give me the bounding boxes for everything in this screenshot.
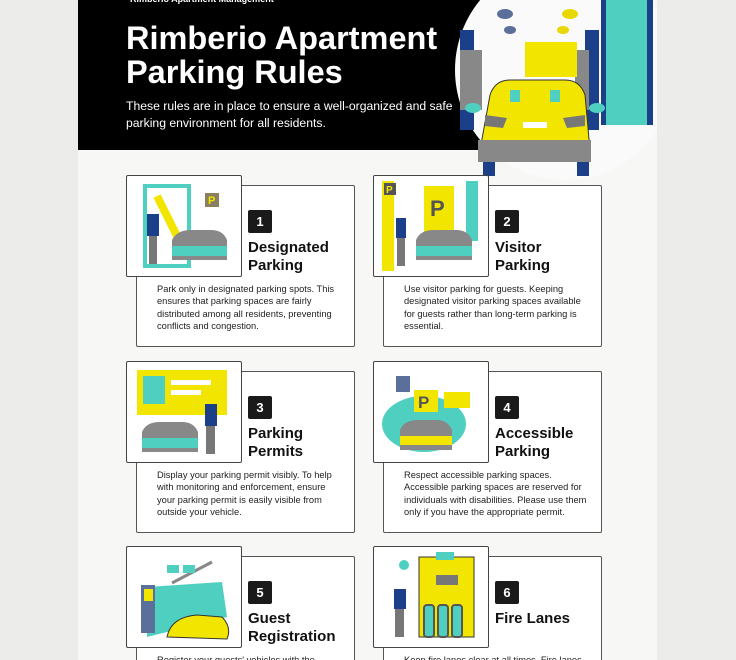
number badge 2 — [495, 210, 519, 233]
illustration 2: P — [386, 185, 393, 196]
number badge 6 — [495, 581, 519, 604]
header black panel — [78, 0, 498, 150]
title — [126, 20, 437, 90]
card 6: Fire Lanes — [373, 546, 602, 660]
heading 4 — [495, 425, 573, 460]
title: Rimberio Apartment — [126, 20, 437, 56]
card 5: Guest Registration — [126, 546, 355, 660]
number badge 1 — [248, 210, 272, 233]
heading 2: Visitor — [495, 239, 541, 256]
intro text: These rules are in place to ensure a well-organized and safe — [126, 99, 453, 113]
heading 3: Parking — [248, 425, 303, 442]
heading 1 — [248, 239, 329, 274]
heading 3: Permits — [248, 443, 303, 460]
heading 4: Accessible — [495, 425, 573, 442]
intro text: parking environment for all residents. — [126, 116, 326, 130]
illustration 6 — [373, 546, 489, 648]
heading 5: Registration — [248, 628, 336, 645]
illustration 2 — [373, 175, 489, 277]
description 1: Park only in designated parking spots. This ensures that parking spaces are fairly distributed among all residents, preventing conflicts and congestion. — [157, 284, 334, 331]
illustration 5 — [126, 546, 242, 648]
card 2: Visitor Parking — [373, 175, 602, 347]
intro text — [126, 99, 453, 130]
illustration 1 — [126, 175, 242, 277]
number badge 3: 3 — [256, 400, 264, 415]
number badge 2: 2 — [503, 214, 511, 229]
heading 5 — [248, 610, 336, 645]
number badge 6: 6 — [503, 585, 511, 600]
heading 5: Guest — [248, 610, 291, 627]
description 4: Respect accessible parking spaces. Accessible parking spaces are reserved for individuals with disabilities. Please use them only if you have the appropriate permit. — [404, 470, 586, 517]
illustration 1: P — [208, 195, 215, 207]
card 3: Parking Permits — [126, 361, 355, 533]
heading 1: Parking — [248, 257, 303, 274]
illustration 4 — [373, 361, 489, 463]
heading 2 — [495, 239, 550, 274]
number badge 4: 4 — [503, 400, 511, 415]
number badge 4 — [495, 396, 519, 419]
illustration 2: P — [430, 196, 445, 221]
heading 2: Parking — [495, 257, 550, 274]
heading 1: Designated — [248, 239, 329, 256]
heading 3 — [248, 425, 303, 460]
heading 4: Parking — [495, 443, 550, 460]
description 2: Use visitor parking for guests. Keeping designated visitor parking spaces available for guests rather than long-term parking is essential. — [404, 284, 581, 331]
number badge 3 — [248, 396, 272, 419]
heading 6: Fire Lanes — [495, 610, 570, 627]
number badge 5: 5 — [256, 585, 264, 600]
number badge 5 — [248, 581, 272, 604]
card 4: Accessible Parking — [373, 361, 602, 533]
number badge 1: 1 — [256, 214, 264, 229]
title: Parking Rules — [126, 54, 343, 90]
illustration 3 — [126, 361, 242, 463]
illustration 4: P — [418, 393, 429, 412]
header illustration: parking garage with yellow car — [455, 0, 653, 176]
card 1: Designated Parking — [126, 175, 355, 347]
description 3: Display your parking permit visibly. To help with monitoring and enforcement, ensure your parking permit is easily visible from outside your vehicle. — [157, 470, 332, 517]
